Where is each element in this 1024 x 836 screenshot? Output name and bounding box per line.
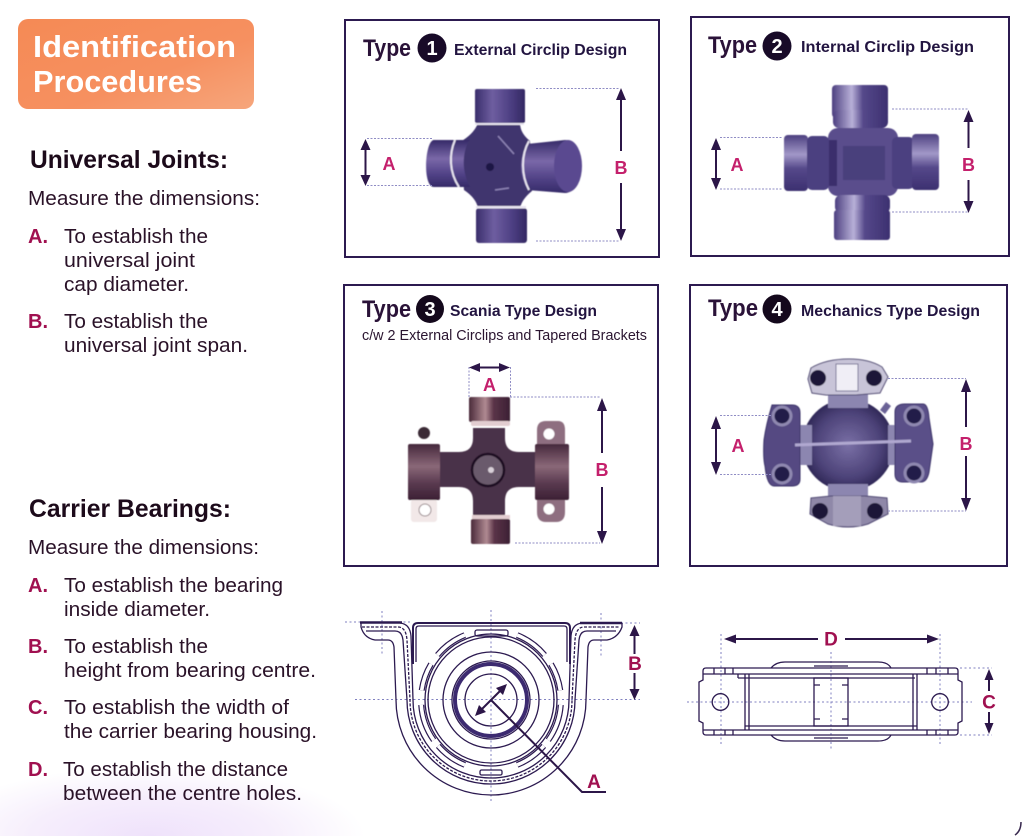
text block: carrier bearings: To establish the bbox=[64, 636, 208, 658]
text block: carrier bearings bbox=[28, 495, 317, 805]
diagram: carrier bearing side view bbox=[687, 630, 996, 750]
text block: universal joints: To establish the bbox=[64, 226, 208, 248]
text block: carrier bearings: To establish the bearing bbox=[64, 575, 283, 597]
text block: carrier bearings: To establish the width of bbox=[64, 697, 289, 719]
heading: type 3 bbox=[362, 295, 647, 344]
arrow: dimension D bbox=[724, 630, 939, 650]
arrow: dimension D: D bbox=[824, 630, 838, 650]
housing outline bbox=[360, 621, 622, 624]
arrow: dimension A: A bbox=[587, 772, 601, 793]
centre lines bbox=[345, 610, 640, 802]
panel: type 3 bbox=[344, 285, 658, 566]
arrow: dimension A bbox=[711, 416, 772, 475]
text block: universal joints: universal joint bbox=[64, 250, 195, 272]
arrow: dimension B bbox=[888, 378, 972, 511]
heading: type 1 bbox=[363, 34, 627, 62]
text block: carrier bearings: Measure the dimensions: bbox=[28, 537, 259, 559]
panel: type 4 bbox=[690, 285, 1007, 566]
heading: type 4: 4 bbox=[771, 299, 783, 321]
text block: carrier bearings: inside diameter. bbox=[64, 599, 210, 621]
arrow: dimension A bbox=[360, 138, 432, 186]
arrow: dimension B bbox=[892, 109, 975, 213]
heading: type 2: Internal Circlip Design bbox=[801, 39, 974, 56]
diagram: carrier bearing front view bbox=[345, 610, 642, 802]
arrow: dimension B: B bbox=[960, 434, 972, 454]
title banner: Identification bbox=[33, 29, 236, 64]
arrow: dimension B bbox=[515, 398, 608, 544]
text block: universal joints: universal joint span. bbox=[64, 335, 248, 357]
text block: universal joints: cap diameter. bbox=[64, 274, 189, 296]
arrow: dimension A bbox=[469, 363, 600, 397]
arrow: dimension A: A bbox=[730, 155, 744, 175]
arrow: dimension B bbox=[536, 88, 628, 241]
heading: type 4 bbox=[708, 294, 980, 324]
text block: carrier bearings: height from bearing centre. bbox=[64, 660, 316, 682]
arrow: dimension A: A bbox=[382, 154, 396, 174]
panel: type 2 bbox=[691, 17, 1009, 256]
text block: carrier bearings: D. bbox=[28, 759, 48, 781]
heading: type 2 bbox=[708, 32, 974, 60]
heading: type 1: Type bbox=[363, 35, 411, 62]
text block: universal joints: B. bbox=[28, 311, 48, 333]
photo: scania joint bbox=[408, 397, 569, 544]
arrow: dimension A: A bbox=[483, 375, 496, 395]
heading: type 1: External Circlip Design bbox=[454, 42, 627, 59]
photo: internal circlip joint bbox=[784, 85, 939, 240]
text block: carrier bearings: B. bbox=[28, 636, 48, 658]
photo: mechanics joint bbox=[764, 359, 933, 527]
photo: external circlip joint bbox=[426, 89, 582, 243]
text block: universal joints: Universal Joints: bbox=[30, 146, 228, 174]
text block: carrier bearings: To establish the distance bbox=[63, 759, 288, 781]
heading: type 3: c/w 2 External Circlips and Tapered Brackets bbox=[362, 328, 647, 344]
text block: universal joints: A. bbox=[28, 226, 48, 248]
heading: type 4: Mechanics Type Design bbox=[801, 303, 980, 320]
arrow: dimension B: B bbox=[962, 155, 975, 175]
heading: type 3: 3 bbox=[424, 299, 436, 321]
arrow: dimension A bbox=[475, 684, 606, 793]
bearing tabs bbox=[421, 635, 561, 765]
heading: type 2: Type bbox=[708, 32, 757, 59]
heading: type 2: 2 bbox=[771, 36, 783, 58]
title banner bbox=[18, 19, 254, 109]
heading: type 3: Type bbox=[362, 296, 411, 323]
arrow: dimension B: B bbox=[596, 460, 608, 480]
text block: universal joints bbox=[28, 146, 260, 357]
heading: type 4: Type bbox=[708, 295, 758, 322]
arrow: dimension C: C bbox=[982, 692, 996, 714]
text block: carrier bearings: the carrier bearing housing. bbox=[64, 721, 317, 743]
arrow: dimension B bbox=[628, 625, 642, 700]
arrow: dimension B: B bbox=[614, 158, 628, 178]
arrow: dimension B: B bbox=[628, 654, 642, 675]
text block: carrier bearings: C. bbox=[28, 697, 48, 719]
arrow: dimension A bbox=[711, 138, 782, 190]
title banner: Procedures bbox=[33, 64, 202, 99]
text block: universal joints: To establish the bbox=[64, 311, 208, 333]
bearing rings bbox=[425, 634, 557, 766]
heading: type 3: Scania Type Design bbox=[450, 303, 597, 320]
text block: carrier bearings: between the centre holes. bbox=[63, 783, 302, 805]
arrow: dimension C bbox=[982, 669, 996, 734]
text block: carrier bearings: A. bbox=[28, 575, 48, 597]
arrow: dimension A: A bbox=[732, 436, 744, 456]
panel: type 1 bbox=[345, 20, 659, 257]
text block: carrier bearings: Carrier Bearings: bbox=[29, 495, 231, 523]
text block: universal joints: Measure the dimensions: bbox=[28, 188, 260, 210]
heading: type 1: 1 bbox=[426, 38, 438, 60]
